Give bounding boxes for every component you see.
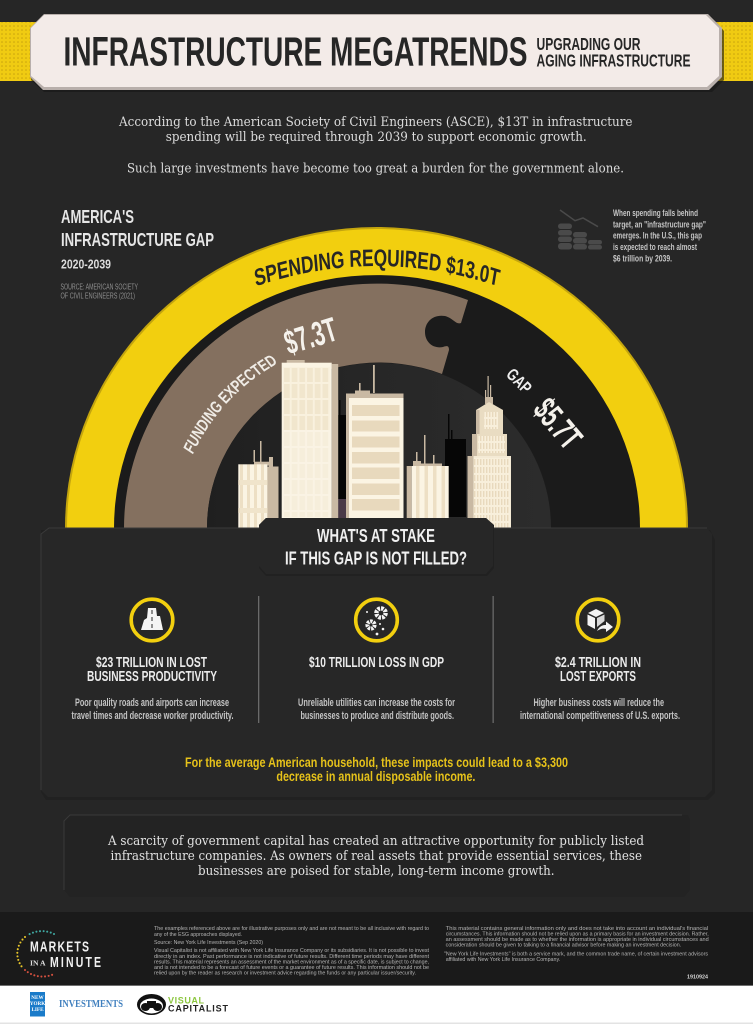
section heading: America's infrastructure gap [60, 206, 214, 301]
arch chart [65, 227, 688, 528]
panel text: infrastructure companies. As owners of real assets that provide essential services, these [110, 849, 642, 864]
infrastructure gap note: target, an "infrastructure gap" [613, 219, 706, 230]
markets in a minute logo: MINUTE [50, 953, 101, 970]
yellow dotted strip [0, 22, 753, 81]
disclaimer right: This material contains general information only and does not take into account an individual's financial [446, 926, 708, 932]
heading: $10 TRILLION LOSS IN GDP [309, 655, 444, 671]
heading: LOST EXPORTS [560, 669, 636, 685]
date range: 2020-2039 [61, 258, 111, 272]
gap arc [114, 275, 640, 528]
stake heading: IF THIS GAP IS NOT FILLED? [285, 548, 467, 568]
panel body [64, 815, 690, 897]
divider [492, 596, 494, 723]
building 4 [407, 435, 449, 518]
building 3 [346, 365, 404, 519]
gap label: GAP [502, 365, 535, 398]
black tower behind [338, 400, 466, 519]
markets in a minute logo [17, 931, 101, 977]
subtitle [536, 34, 690, 70]
spending required arc [65, 227, 688, 528]
subtitle: UPGRADING OUR [536, 34, 641, 54]
New York Life logo [30, 992, 123, 1016]
heading: AMERICA'S [61, 206, 134, 227]
Visual Capitalist logo: CAPITALIST [168, 1004, 228, 1014]
disclaimer left: directly in an index. Past performance is not indicative of future results. Different time periods may have different [154, 954, 430, 960]
disclaimer left: Visual Capitalist is not affiliated with New York Life Insurance Company or its subsidiaries. It is not possible to invest [154, 948, 430, 954]
opportunity panel [64, 815, 690, 897]
description [520, 697, 680, 722]
header banner [0, 14, 753, 92]
infrastructure gap note: When spending falls behind [613, 208, 698, 219]
infrastructure gap note: $6 trillion by 2039. [613, 253, 672, 264]
description: Unreliable utilities can increase the costs for [298, 697, 455, 709]
disclaimer left: Source: New York Life Investments (Sep 2020) [154, 940, 263, 946]
gap value: $5.7T [526, 390, 590, 456]
footer band [0, 912, 753, 985]
description: businesses to produce and distribute goods. [300, 710, 454, 722]
logo bar background [0, 986, 753, 1023]
disclaimer left [154, 926, 430, 977]
infrastructure gap note [613, 208, 706, 264]
panel text: businesses are poised for stable, long-term income growth. [198, 864, 554, 879]
what's at stake panel [41, 518, 715, 800]
yellow callout: decrease in annual disposable income. [276, 769, 475, 784]
funding expected arc with puzzle edge [124, 284, 468, 528]
disclaimer left: any of the ESG approaches displayed. [154, 932, 242, 938]
logo text: MARKETS [30, 938, 89, 955]
New York Life logo: INVESTMENTS [59, 999, 123, 1010]
source: SOURCE: AMERICAN SOCIETY [60, 282, 138, 292]
description: travel times and decrease worker productivity. [72, 710, 234, 722]
disclaimer left: The examples referenced above are for illustrative purposes only and are not meant to be all inclusive with regard to [154, 926, 429, 932]
inner arch area [207, 363, 551, 528]
yellow callout [185, 755, 568, 784]
divider [258, 596, 259, 723]
panel text: A scarcity of government capital has created an attractive opportunity for publicly listed [107, 834, 644, 849]
stake heading [285, 525, 467, 568]
markets in a minute logo: IN A [30, 960, 46, 968]
description [298, 697, 455, 722]
document code: 1910924 [687, 974, 709, 980]
column: productivity [72, 599, 234, 722]
building 5 tower [468, 376, 511, 528]
intro text: Such large investments have become too great a burden for the government alone. [127, 160, 624, 176]
heading [555, 655, 641, 685]
New York Life logo: NEW [31, 995, 45, 1001]
heading: BUSINESS PRODUCTIVITY [87, 669, 217, 685]
building 1 [238, 441, 278, 528]
disclaimer right: "New York Life Investments" is both a service mark, and the common trade name, of certain investment advisors [444, 951, 708, 957]
binocular mark [137, 994, 166, 1015]
heading [61, 206, 214, 250]
source [60, 282, 138, 301]
disclaimer right: consideration should be given to talking to a financial advisor before making an investment decision. [446, 943, 681, 949]
logo bar [0, 986, 753, 1024]
disclaimer right: circumstances. This information should not be relied upon as a primary basis for an investment decision. Rather, [446, 932, 709, 938]
building 2 [282, 360, 338, 519]
description: Poor quality roads and airports can increase [75, 697, 229, 709]
infrastructure gap note: is expected to reach almost [613, 242, 698, 253]
panel body [41, 528, 715, 800]
icon: road [131, 599, 173, 641]
spending label: SPENDING REQUIRED $13.0T [254, 249, 501, 286]
disclaimer left: results. This material represents an assessment of the market environment as of a specific date, is subject to change, [154, 959, 429, 965]
New York Life logo: LIFE [31, 1007, 44, 1013]
city skyline [238, 360, 511, 528]
dotted ring [17, 931, 54, 977]
tab [259, 518, 494, 576]
disclaimer right: an assessment should be made as to whether the information is appropriate in individual circumstances and [446, 937, 709, 943]
heading: $23 TRILLION IN LOST [96, 655, 207, 671]
banner plate [30, 14, 724, 92]
heading: $2.4 TRILLION IN [555, 655, 641, 671]
description: international competitiveness of U.S. exports. [520, 710, 680, 722]
disclaimer right [444, 926, 709, 963]
Visual Capitalist logo [137, 994, 228, 1015]
intro text: According to the American Society of Civil Engineers (ASCE), $13T in infrastructure [118, 114, 632, 129]
panel text [107, 834, 644, 879]
funding value: $7.3T [280, 310, 341, 362]
Visual Capitalist logo: VISUAL [168, 996, 204, 1006]
footer [0, 912, 753, 986]
intro text [118, 114, 632, 176]
disclaimer right: affiliated with New York Life Insurance Company. [446, 957, 560, 963]
heading: INFRASTRUCTURE GAP [61, 229, 214, 250]
column: exports [520, 599, 680, 722]
description [72, 697, 234, 722]
yellow callout: For the average American household, these impacts could lead to a $3,300 [185, 755, 568, 770]
stake heading: WHAT'S AT STAKE [317, 525, 435, 546]
heading [87, 655, 217, 685]
intro text: spending will be required through 2039 to support economic growth. [166, 129, 587, 144]
icon: broken gears [356, 599, 397, 641]
infrastructure gap note: emerges. In the U.S., this gap [613, 231, 702, 242]
icon: falling line and coins [558, 210, 602, 250]
disclaimer left: relied upon by the reader as research or investment advice regarding the funds or any particular issuer/security. [154, 971, 416, 977]
title: INFRASTRUCTURE MEGATRENDS [64, 28, 528, 74]
icon: box with arrow [577, 599, 619, 641]
disclaimer left: and is not intended to be a forecast of future events or a guarantee of future results. This information should not be [154, 965, 429, 971]
column: GDP [298, 599, 455, 722]
source: OF CIVIL ENGINEERS (2021) [60, 292, 135, 301]
description: Higher business costs will reduce the [534, 697, 664, 709]
funding label: FUNDING EXPECTED [183, 356, 276, 454]
New York Life logo: YORK [30, 1001, 45, 1007]
